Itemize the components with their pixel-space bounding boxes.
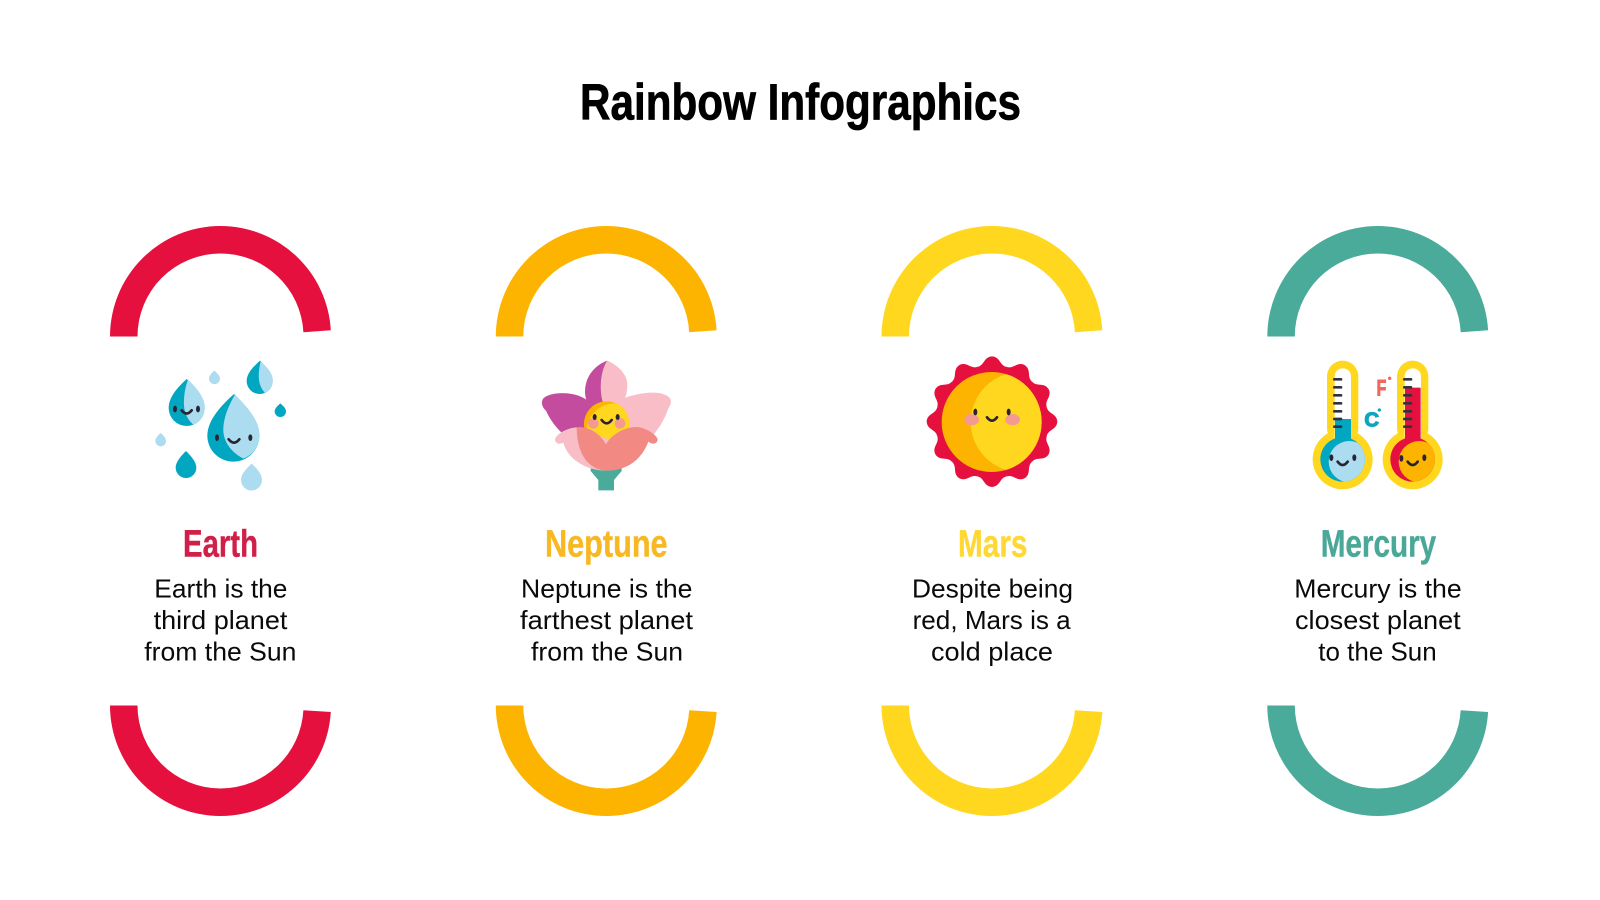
text block: Neptune: farthest planet	[520, 605, 694, 635]
panel: Neptune	[496, 226, 717, 816]
text block: Mars	[912, 573, 1073, 666]
panel: Earth	[110, 226, 331, 816]
text block: Mercury: closest planet	[1295, 605, 1462, 635]
icon: water drops	[155, 361, 286, 490]
heading: Mercury: Mercury	[1321, 524, 1436, 566]
heading: Neptune: Neptune	[545, 524, 668, 566]
panel: Mercury	[1267, 226, 1488, 816]
text block: Earth	[144, 573, 296, 666]
heading: Mars: Mars	[958, 524, 1028, 566]
text block: Mercury	[1294, 573, 1462, 666]
text block: Mars: cold place	[931, 636, 1053, 666]
icon: thermometers: C	[1364, 408, 1379, 431]
text block: Neptune: from the Sun	[531, 636, 683, 666]
icon: thermometers	[1313, 361, 1443, 489]
text block: Earth: third planet	[154, 605, 288, 635]
top arc: Mercury	[1267, 226, 1488, 336]
text block: Earth: Earth is the	[154, 573, 287, 603]
top arc: Mars	[882, 226, 1102, 336]
heading: Earth: Earth	[183, 524, 258, 566]
icon: flower	[542, 361, 671, 490]
bottom arc: Mars	[882, 706, 1102, 816]
title: Rainbow Infographics	[580, 74, 1021, 130]
text block: Mars: Despite being	[912, 573, 1073, 603]
panel: Mars	[882, 226, 1102, 816]
icon: sun	[927, 356, 1071, 487]
text block: Neptune: Neptune is the	[521, 573, 692, 603]
bottom arc: Earth	[110, 706, 331, 816]
text block: Mercury: to the Sun	[1318, 636, 1437, 666]
text block: Mars: red, Mars is a	[913, 605, 1071, 635]
text block: Neptune	[520, 573, 694, 666]
icon: thermometers: F	[1377, 376, 1386, 401]
bottom arc: Mercury	[1267, 706, 1488, 816]
text block: Earth: from the Sun	[144, 636, 296, 666]
bottom arc: Neptune	[496, 706, 717, 816]
top arc: Neptune	[496, 226, 717, 336]
text block: Mercury: Mercury is the	[1294, 573, 1462, 603]
top arc: Earth	[110, 226, 331, 336]
